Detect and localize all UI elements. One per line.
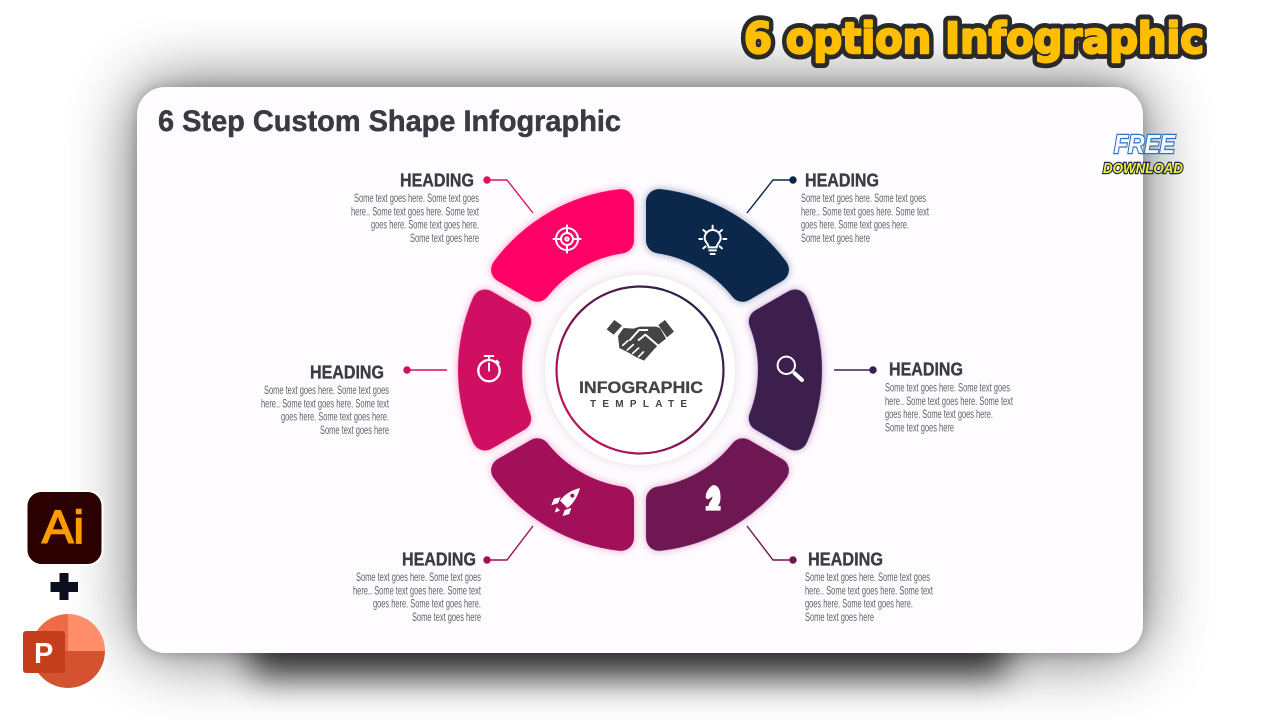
- segment: left: [427, 293, 560, 437]
- text block: bottom left: here.. Some text goes here. Some text: [353, 583, 481, 597]
- icon: Illustrator logo: [26, 491, 102, 565]
- free download badge: DOWNLOAD: [1103, 160, 1183, 177]
- text block: left: HEADING: [310, 362, 384, 382]
- connector: top left: [484, 177, 533, 213]
- text block: top left: HEADING: [400, 170, 474, 190]
- text block: right: Some text goes here. Some text goes: [885, 380, 1010, 394]
- icon: stopwatch: [478, 356, 500, 381]
- segment: right: [720, 303, 853, 447]
- text block: right: here.. Some text goes here. Some text: [885, 394, 1013, 408]
- icon: handshake: [607, 320, 674, 361]
- text block: left: goes here. Some text goes here.: [281, 410, 389, 424]
- segment: bottom right: [642, 427, 776, 572]
- connector: bottom right: [747, 526, 796, 563]
- main title: 6 Step Custom Shape Infographic: [158, 105, 621, 138]
- free download badge: FREE: [1114, 129, 1176, 159]
- segment: bottom left: [504, 451, 621, 538]
- main card panel: [137, 87, 1143, 653]
- center subtitle: TEMPLATE: [590, 399, 687, 410]
- segment: top right: [659, 202, 776, 289]
- text block: right: [885, 360, 1013, 434]
- center title: INFOGRAPHIC: [579, 378, 703, 397]
- text block: bottom left: HEADING: [402, 550, 476, 570]
- icon: target: [553, 225, 581, 253]
- card drop shadow: [137, 87, 1143, 676]
- icon: PowerPoint logo: [23, 614, 105, 688]
- text block: left: Some text goes here: [320, 423, 389, 437]
- text block: right: goes here. Some text goes here.: [885, 407, 993, 421]
- icon: chess knight: [706, 485, 721, 511]
- text block: left: here.. Some text goes here. Some text: [261, 396, 389, 410]
- text block: bottom left: Some text goes here. Some text goes: [356, 570, 481, 584]
- icon: PowerPoint logo: P: [34, 638, 53, 670]
- text block: right: HEADING: [889, 360, 963, 380]
- text block: bottom right: HEADING: [808, 550, 883, 570]
- text block: bottom right: Some text goes here. Some text goes: [805, 570, 930, 584]
- text block: top left: Some text goes here. Some text goes: [354, 191, 479, 205]
- connector: left: [404, 367, 447, 373]
- connector: bottom left: [484, 526, 533, 563]
- segment: top left: [504, 168, 638, 313]
- text block: top right: [801, 170, 929, 245]
- icon: magnifier: [778, 357, 802, 380]
- text block: bottom right: [805, 550, 933, 624]
- text block: bottom right: goes here. Some text goes here.: [805, 596, 913, 610]
- text block: right: Some text goes here: [885, 420, 954, 434]
- text block: bottom right: here.. Some text goes here. Some text: [805, 583, 933, 597]
- icon: plus sign: [50, 573, 78, 600]
- connector: right: [834, 367, 876, 373]
- icon: Illustrator logo: Ai: [42, 501, 84, 553]
- free download badge: [1103, 129, 1183, 177]
- text block: left: Some text goes here. Some text goes: [264, 383, 389, 397]
- text block: top right: Some text goes here. Some text goes: [801, 191, 926, 205]
- banner title: 6 option Infographic: [744, 14, 1204, 64]
- text block: top left: here.. Some text goes here. Some text: [351, 204, 479, 218]
- text block: top right: here.. Some text goes here. Some text: [801, 204, 929, 218]
- text block: top right: goes here. Some text goes here.: [801, 218, 909, 232]
- text block: left: [261, 362, 389, 437]
- text block: top right: Some text goes here: [801, 231, 870, 245]
- connector: top right: [747, 177, 796, 213]
- text block: top left: [351, 170, 479, 245]
- center hub: [545, 275, 735, 465]
- text block: bottom left: [353, 550, 481, 624]
- text block: bottom left: goes here. Some text goes here.: [373, 596, 481, 610]
- text block: bottom right: Some text goes here: [805, 610, 874, 624]
- text block: top right: HEADING: [805, 170, 879, 190]
- banner title: 6 option Infographic: [744, 14, 1204, 64]
- icon: light bulb: [699, 226, 726, 254]
- text block: bottom left: Some text goes here: [412, 610, 481, 624]
- text block: top left: Some text goes here: [410, 231, 479, 245]
- icon: rocket: [551, 488, 580, 516]
- text block: top left: goes here. Some text goes here.: [371, 218, 479, 232]
